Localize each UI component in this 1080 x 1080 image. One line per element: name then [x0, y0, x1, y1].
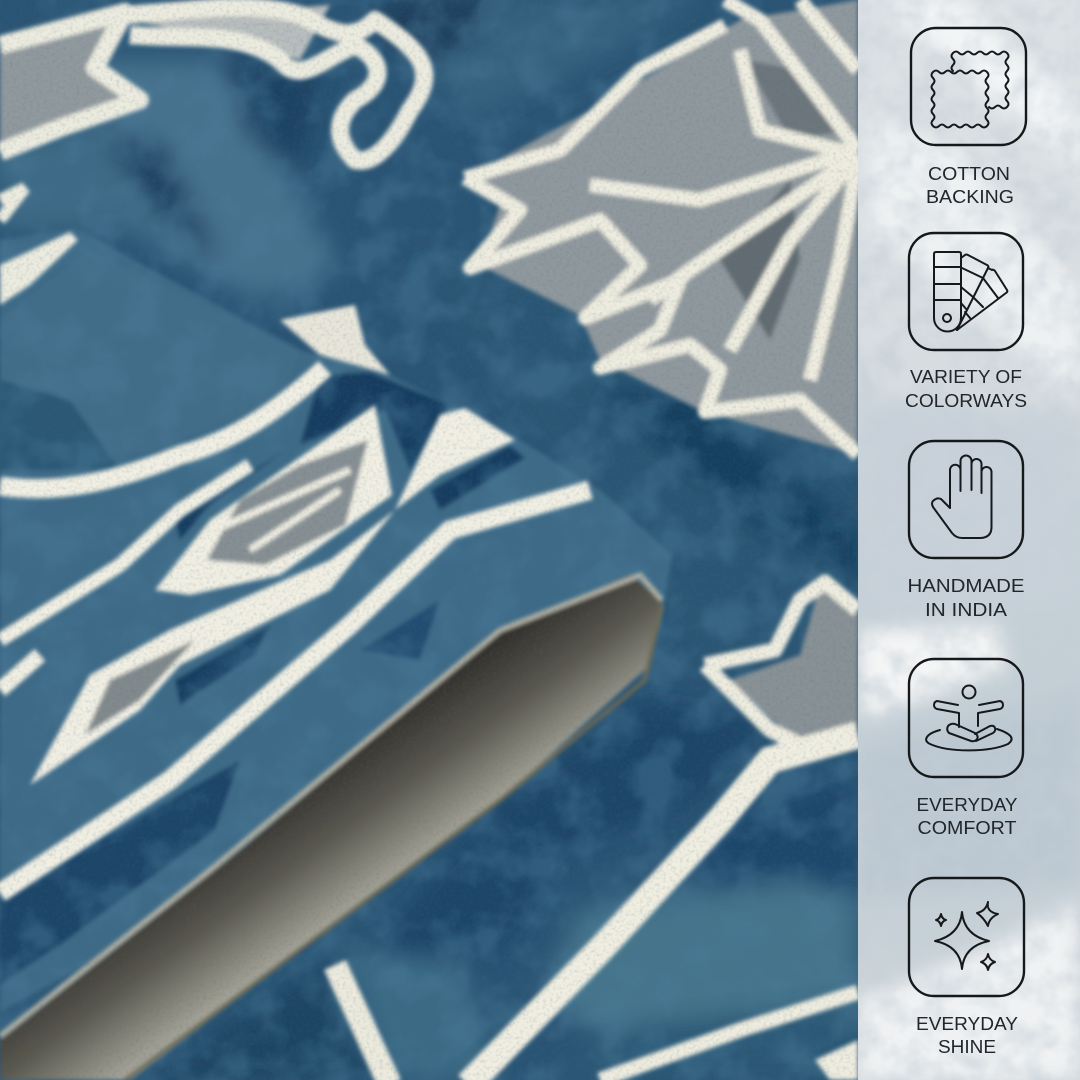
icon: swatch fan — [909, 233, 1023, 350]
label: everyday shine: EVERYDAY — [916, 1013, 1018, 1034]
label: everyday shine: SHINE — [938, 1036, 996, 1057]
top-right flower motif — [465, 0, 858, 455]
lower-right motif and bands — [335, 582, 858, 1080]
label: handmade in india — [908, 575, 1024, 620]
label: variety of colorways: VARIETY OF — [910, 366, 1022, 387]
icon: sparkles — [909, 878, 1024, 996]
right panel background — [858, 0, 1080, 1080]
rug photograph background — [0, 0, 858, 1080]
label: everyday comfort: COMFORT — [918, 817, 1016, 838]
icon: fabric swatches — [911, 28, 1026, 145]
cream border lines — [0, 368, 590, 893]
flap cream pattern — [0, 368, 590, 893]
label: everyday comfort — [916, 794, 1018, 838]
mottled wool shading — [0, 0, 858, 1080]
label: everyday shine — [916, 1013, 1018, 1057]
label: everyday comfort: EVERYDAY — [916, 794, 1018, 815]
feature: everyday comfort — [909, 659, 1023, 838]
label: cotton backing: COTTON — [928, 163, 1010, 184]
icon: meditating figure — [909, 659, 1023, 777]
label: cotton backing: BACKING — [926, 186, 1014, 207]
label: handmade in india: IN INDIA — [925, 599, 1008, 620]
leaf motif upper — [155, 405, 515, 595]
rolled flap base — [0, 228, 672, 1012]
label: variety of colorways — [905, 366, 1027, 411]
rug underside backing — [0, 575, 662, 1080]
feature: handmade in india — [908, 441, 1024, 620]
label: cotton backing — [926, 163, 1014, 207]
feature: cotton backing — [911, 28, 1026, 207]
feature: everyday shine — [909, 878, 1024, 1057]
label: variety of colorways: COLORWAYS — [905, 390, 1027, 411]
feature: variety of colorways — [905, 233, 1027, 411]
label: handmade in india: HANDMADE — [908, 575, 1024, 596]
icon: hand — [909, 441, 1023, 558]
leaf motif lower — [30, 510, 395, 785]
wool grain overlay — [0, 0, 858, 1080]
top-left floral motif — [0, 5, 424, 375]
